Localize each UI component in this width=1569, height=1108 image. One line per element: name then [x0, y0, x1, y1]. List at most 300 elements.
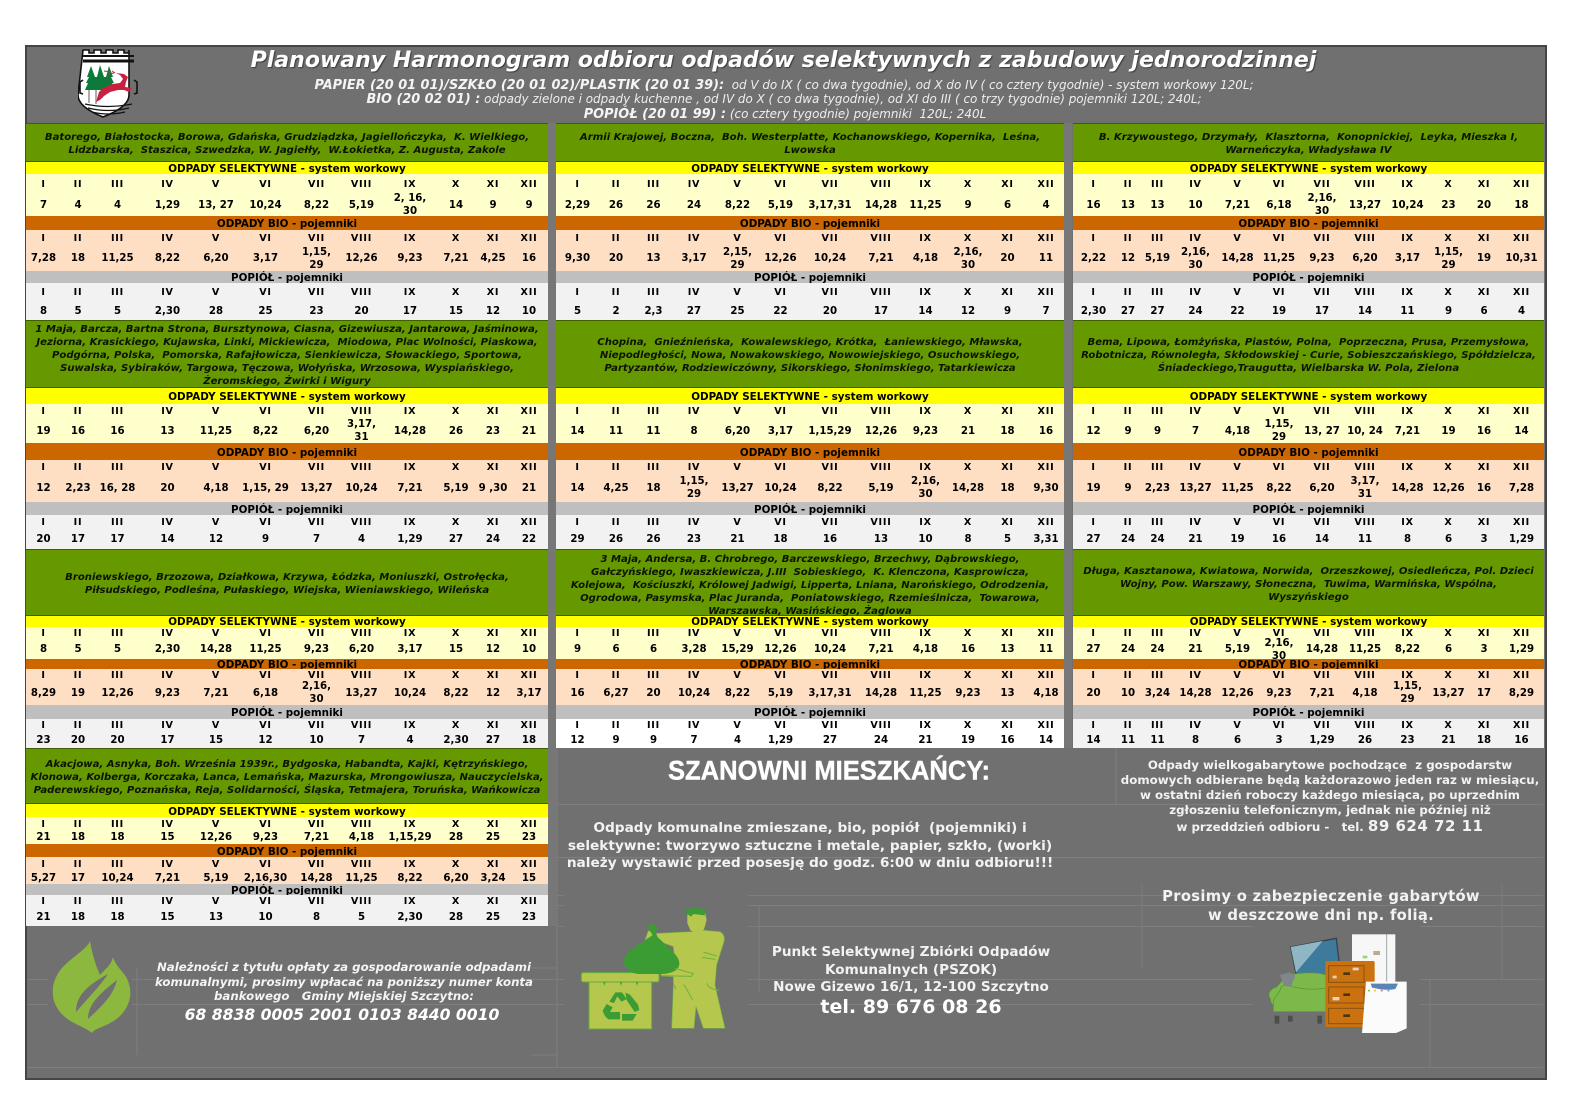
dates: ash: 27 — [1086, 534, 1101, 544]
months: ash: V — [1233, 720, 1242, 731]
dates: bio waste: 16 — [570, 688, 585, 698]
months: selective waste: VIII — [870, 178, 892, 190]
street list — [556, 123, 1064, 162]
dates: selective waste: 14,28 — [200, 644, 232, 655]
heading: selective waste — [26, 616, 548, 627]
dates: selective waste: 8,22 — [304, 200, 329, 210]
heading: bio waste: ODPADY BIO - pojemniki — [217, 218, 357, 230]
dates: selective waste: 11,25 — [200, 426, 232, 436]
panel: schedule group 3 — [1073, 123, 1544, 320]
icon: man putting bag in recycling bin — [564, 895, 748, 1040]
months: selective waste: III — [647, 406, 660, 417]
months: bio waste: VIII — [351, 859, 372, 870]
months: bio waste: IV — [161, 232, 174, 244]
months: bio waste: IX — [919, 670, 932, 680]
months: bio waste: XI — [487, 462, 499, 472]
dates: ash: 8 — [1192, 734, 1199, 746]
dates: ash: 6 — [1445, 534, 1452, 544]
dates: ash: 19 — [961, 734, 975, 746]
months: bio waste: V — [733, 462, 742, 472]
months: ash: X — [452, 516, 460, 528]
months: ash: III — [1151, 720, 1164, 731]
months: selective waste: X — [1444, 406, 1453, 417]
dates: selective waste: 6 — [1004, 200, 1011, 210]
dates: bio waste: 3,17, — [1350, 476, 1380, 487]
months: selective waste: XII — [1038, 178, 1054, 190]
months: selective waste: VIII — [351, 178, 372, 190]
months: selective waste: IV — [688, 628, 700, 639]
months: ash: II — [1124, 720, 1132, 731]
street list — [26, 549, 548, 616]
months: selective waste: IV — [161, 628, 174, 639]
heading: ash: POPIÓŁ - pojemniki — [754, 707, 866, 719]
dates: ash: 9 — [262, 534, 269, 544]
months: selective waste: III — [111, 178, 124, 190]
dates: selective waste: 9 — [525, 200, 533, 210]
months: ash: IV — [1189, 287, 1202, 298]
months: selective waste — [556, 404, 1064, 417]
dates: selective waste: 2,30 — [155, 644, 180, 655]
months: bio waste: VIII — [870, 462, 892, 472]
dates: selective waste: 11 — [1039, 644, 1053, 655]
dates: selective waste: 3,17, — [347, 419, 376, 430]
months: bio waste: II — [612, 232, 620, 244]
months: ash: XI — [1478, 516, 1490, 528]
notice: PSZOK address: Komunalnych (PSZOK) — [825, 962, 997, 978]
months: ash: I — [1091, 720, 1096, 731]
months: bio waste: X — [964, 462, 972, 472]
months: selective waste: IV — [688, 406, 700, 417]
dates: selective waste: 6,20 — [725, 426, 750, 436]
notice: payment details: komunalnymi, prosimy wpłacać na poniższy numer konta — [155, 975, 533, 989]
heading: ash — [26, 271, 548, 283]
months: bio waste: VI — [259, 232, 272, 244]
months: ash: I — [575, 287, 580, 298]
dates: bio waste: 19 — [1477, 253, 1491, 264]
months: bio waste: X — [964, 232, 972, 244]
dates: ash: 26 — [646, 534, 661, 544]
months: selective waste: VI — [774, 406, 787, 417]
months: selective waste: X — [964, 178, 972, 190]
months: ash: XII — [1513, 287, 1530, 298]
dates: bio waste: 12,26 — [345, 253, 378, 264]
months: bio waste — [556, 230, 1064, 244]
months: ash: I — [41, 516, 46, 528]
street list — [26, 320, 548, 388]
dates: bio waste: 13 — [1000, 688, 1015, 698]
dates: bio waste: 29 — [1400, 694, 1415, 705]
dates: bio waste: 11,25 — [1263, 253, 1295, 264]
months: bio waste: III — [111, 232, 124, 244]
months: bio waste: XII — [1513, 232, 1530, 244]
dates: selective waste: 8,22 — [253, 426, 278, 436]
months: ash: VI — [774, 516, 787, 528]
street list: Wyszyńskiego — [1268, 592, 1349, 603]
months: ash: IX — [1401, 287, 1414, 298]
months: ash: VI — [1273, 287, 1285, 298]
months: ash: XII — [1038, 287, 1054, 298]
dates: bio waste: 8,22 — [725, 688, 750, 698]
dates: ash: 11 — [1358, 534, 1372, 544]
dates: selective waste: 11,25 — [249, 644, 282, 655]
months: bio waste: IX — [1401, 670, 1414, 680]
dates: ash: 4 — [358, 534, 365, 544]
heading: ash: POPIÓŁ - pojemniki — [1253, 707, 1364, 719]
months: selective waste: XI — [1001, 628, 1014, 639]
dates: ash: 11 — [1400, 306, 1415, 316]
dates: ash: 11 — [1121, 734, 1135, 746]
months: selective waste: VI — [259, 818, 272, 830]
dates: selective waste: 12,26 — [200, 832, 232, 843]
months: ash: V — [1233, 287, 1242, 298]
dates: ash: 9 — [612, 734, 620, 746]
heading: bio waste: ODPADY BIO - pojemniki — [740, 218, 880, 230]
dates: bio waste: 14,28 — [1221, 253, 1254, 264]
dates: ash: 7 — [313, 534, 320, 544]
dates: bio waste: 10,24 — [101, 872, 134, 884]
months: selective waste: XI — [1478, 178, 1490, 190]
months: selective waste: II — [74, 406, 82, 417]
dates: selective waste: 6 — [1445, 644, 1452, 655]
street list: Partyzantów, Rodziewiczówny, Sikorskiego, Słonimskiego, Tatarkiewicza — [604, 362, 1016, 374]
months: bio waste: XII — [1513, 462, 1530, 472]
dates: selective waste: 18 — [1514, 200, 1529, 210]
dates: selective waste: 4 — [114, 200, 121, 210]
heading: selective waste: ODPADY SELEKTYWNE - system workowy — [691, 391, 929, 403]
months: ash: V — [733, 516, 742, 528]
dates: selective waste: 21 — [36, 832, 51, 843]
months: bio waste: VIII — [351, 670, 372, 680]
dates: bio waste: 12 — [486, 688, 500, 698]
dates: selective waste: 12,26 — [865, 426, 897, 436]
months: selective waste: IV — [1189, 628, 1202, 639]
dates: ash: 24 — [486, 534, 500, 544]
heading: bio waste — [26, 844, 548, 857]
dates: selective waste: 13,27 — [1349, 200, 1381, 210]
months: ash: XI — [487, 720, 499, 731]
street list — [26, 748, 548, 804]
months: selective waste: II — [74, 628, 82, 639]
dates: selective waste: 10,24 — [814, 644, 846, 655]
months: bio waste: XI — [1001, 232, 1014, 244]
months: bio waste: VI — [259, 670, 272, 680]
dates: bio waste — [26, 472, 548, 502]
notice: bulky waste collection: zgłoszeniu telefonicznym, jednak nie później niż — [1169, 803, 1491, 817]
months: ash: XII — [1038, 516, 1054, 528]
heading: ash — [26, 502, 548, 515]
months: selective waste — [556, 627, 1064, 638]
months: selective waste: II — [612, 628, 620, 639]
heading: bio waste — [26, 443, 548, 460]
dates: bio waste: 29 — [687, 489, 701, 500]
icon: green leaf — [48, 938, 132, 1038]
months: ash: VIII — [351, 287, 372, 298]
dates: bio waste: 12,26 — [1221, 688, 1254, 698]
months: selective waste: XI — [487, 178, 499, 190]
months: ash: II — [1124, 287, 1132, 298]
subtitle: paper, glass, plastic schedule: PAPIER (20 01 01)/SZKŁO (20 01 02)/PLASTIK (20 01 39): od V do IX ( co dwa tygodnie), od X do IV ( co cztery tygodnie) - system workowy 120L; — [314, 78, 1254, 93]
dates: selective waste: 10 — [1188, 200, 1203, 210]
dates: selective waste: 13 — [1121, 200, 1135, 210]
months: ash: VIII — [870, 516, 892, 528]
heading: bio waste — [556, 659, 1064, 669]
months: ash: VI — [774, 720, 787, 731]
street list — [1073, 123, 1544, 162]
dates: selective waste: 2, 16, — [394, 193, 426, 204]
months: bio waste: II — [612, 462, 620, 472]
dates: bio waste: 18 — [646, 482, 661, 494]
months: ash: I — [41, 287, 46, 298]
street list: 3 Maja, Andersa, B. Chrobrego, Barczewskiego, Brzechwy, Dąbrowskiego, — [600, 554, 1020, 565]
months: selective waste: IX — [404, 178, 416, 190]
months: ash: VIII — [1354, 516, 1376, 528]
dates: ash: 9 — [650, 734, 657, 746]
dates: bio waste: 29 — [1441, 260, 1456, 270]
dates: bio waste — [1073, 472, 1544, 502]
months: selective waste: I — [41, 406, 46, 417]
city coat of arms logo — [78, 49, 138, 118]
months: bio waste: I — [41, 859, 46, 870]
dates: selective waste: 30 — [1315, 206, 1329, 217]
heading: dear residents: SZANOWNI MIESZKAŃCY: — [668, 756, 990, 786]
dates: ash: 28 — [449, 912, 463, 922]
months: ash: VI — [774, 287, 787, 298]
months: ash: IX — [404, 516, 416, 528]
dates: bio waste: 3,17,31 — [808, 688, 852, 698]
street list: Klonowa, Kolberga, Korczaka, Lanca, Lemańska, Mazurska, Mrongowiusza, Nauczycielska, — [30, 772, 543, 783]
dates: ash: 22 — [773, 306, 788, 316]
dates: selective waste: 9 — [574, 644, 581, 655]
dates: ash: 24 — [1150, 534, 1165, 544]
months: ash: IV — [688, 720, 700, 731]
dates: selective waste: 8 — [690, 426, 698, 436]
months: selective waste: II — [1124, 628, 1132, 639]
dates: bio waste: 17 — [71, 872, 85, 884]
street list: Żeromskiego, Żwirki i Wigury — [203, 376, 371, 386]
dates: bio waste: 10,24 — [394, 688, 426, 698]
dates: selective waste: 19 — [36, 426, 51, 436]
dates: ash: 27 — [449, 534, 463, 544]
months: ash: X — [964, 516, 972, 528]
notice: payment details: Należności z tytułu opłaty za gospodarowanie odpadami — [157, 960, 531, 974]
dates: selective waste: 14,28 — [865, 200, 897, 210]
months: selective waste: IX — [919, 178, 932, 190]
months: selective waste: V — [212, 628, 220, 639]
months: selective waste: VIII — [1354, 178, 1376, 190]
months: selective waste: V — [212, 818, 220, 830]
months: ash — [556, 515, 1064, 527]
months: selective waste: VIII — [351, 628, 372, 639]
dates: selective waste: 5,19 — [1225, 644, 1250, 655]
dates: ash: 6 — [1234, 734, 1241, 746]
dates: ash: 3,31 — [1033, 534, 1059, 544]
notice: bulky waste collection: w przeddzień odbioru - tel. 89 624 72 11 — [1176, 817, 1484, 835]
dates: selective waste: 13, 27 — [198, 200, 234, 210]
dates: bio waste: 9,23 — [397, 253, 423, 264]
street list: Jeziorna, Krasickiego, Kujawska, Linki, Mickiewicza, Miodowa, Plac Wolności, Piaskowa, — [36, 336, 538, 348]
panel: schedule group 1 — [26, 123, 548, 320]
months: selective waste — [26, 627, 548, 638]
months: ash: III — [111, 720, 124, 731]
dates: bio waste: 8,29 — [1509, 688, 1534, 698]
dates: bio waste: 2,23 — [65, 482, 91, 494]
months: bio waste: VII — [822, 670, 838, 680]
months: ash: V — [212, 287, 220, 298]
dates: ash: 8 — [40, 306, 47, 316]
dates: selective waste: 1,29 — [155, 200, 180, 210]
notice: bulky waste collection — [1121, 758, 1539, 835]
months: bio waste — [556, 460, 1064, 472]
heading: bio waste — [26, 216, 548, 230]
months: bio waste: X — [452, 670, 460, 680]
months: bio waste: V — [212, 462, 220, 472]
dates: ash: 21 — [1441, 734, 1456, 746]
dates: ash — [1073, 527, 1544, 549]
months: ash: VII — [1314, 287, 1330, 298]
months: ash: IX — [404, 720, 416, 731]
dates: selective waste: 21 — [961, 426, 975, 436]
dates: selective waste: 6,20 — [349, 644, 374, 655]
dates: ash — [26, 730, 548, 748]
dates: ash: 26 — [1358, 734, 1372, 746]
dates: selective waste: 14 — [449, 200, 463, 210]
street list — [26, 123, 548, 162]
months: selective waste: VIII — [870, 628, 892, 639]
months: ash: IX — [919, 516, 932, 528]
dates: ash: 25 — [730, 306, 745, 316]
dates: selective waste: 4,18 — [1225, 426, 1250, 436]
dates: selective waste: 15 — [449, 644, 463, 655]
dates: bio waste: 7,21 — [443, 253, 469, 264]
months: bio waste: I — [41, 670, 46, 680]
dates: bio waste: 5,19 — [1145, 253, 1170, 264]
months: bio waste: IX — [404, 232, 416, 244]
dates: bio waste — [556, 244, 1064, 271]
notice: PSZOK address: Nowe Gizewo 16/1, 12-100 Szczytno — [773, 979, 1049, 995]
dates: bio waste: 30 — [918, 489, 933, 500]
dates: bio waste — [556, 679, 1064, 705]
dates: selective waste: 18 — [1000, 426, 1015, 436]
street list: Wojny, Pow. Warszawy, Słoneczna, Tuwima, Warmińska, Wspólna, — [1120, 579, 1497, 590]
months: selective waste: VIII — [351, 406, 372, 417]
dates: bio waste: 5,19 — [443, 482, 469, 494]
months: selective waste: V — [212, 178, 220, 190]
dates: ash: 23 — [1400, 734, 1415, 746]
heading: bio waste: ODPADY BIO - pojemniki — [1238, 218, 1379, 230]
months: selective waste: V — [1233, 406, 1242, 417]
dates: selective waste: 7,21 — [304, 832, 329, 843]
dates: ash: 8 — [313, 912, 320, 922]
months: ash: XI — [487, 516, 499, 528]
dates: ash: 28 — [209, 306, 223, 316]
months: selective waste — [556, 174, 1064, 192]
months: selective waste: VII — [1314, 406, 1330, 417]
months: ash: IV — [1189, 516, 1202, 528]
months: bio waste: XI — [1478, 462, 1490, 472]
dates: bio waste: 4,18 — [203, 482, 229, 494]
dates: ash: 5 — [1004, 534, 1011, 544]
months: ash: XII — [521, 896, 537, 907]
dates: selective waste: 6 — [650, 644, 657, 655]
dates: ash: 10 — [522, 306, 536, 316]
dates: bio waste: 19 — [71, 688, 85, 698]
months: bio waste: IV — [161, 462, 174, 472]
dates: bio waste: 11,25 — [909, 688, 942, 698]
dates: bio waste — [1073, 244, 1544, 271]
street list: Warneńczyka, Władysława IV — [1225, 144, 1392, 156]
months: bio waste: V — [212, 232, 220, 244]
dates: ash: 12 — [961, 306, 975, 316]
panel: schedule group 8 — [556, 549, 1064, 748]
dates: selective waste: 3,28 — [681, 644, 707, 655]
dates: bio waste: 20 — [160, 482, 175, 494]
dates: selective waste — [1073, 417, 1544, 443]
dates: selective waste: 7,21 — [1225, 200, 1250, 210]
dates: ash: 10 — [258, 912, 273, 922]
months: ash: IV — [1189, 720, 1202, 731]
months: ash: VI — [1273, 720, 1285, 731]
months: ash: VI — [1273, 516, 1285, 528]
months: bio waste: IX — [1401, 462, 1414, 472]
dates: selective waste: 1,15,29 — [388, 832, 432, 843]
months: ash: I — [41, 720, 46, 731]
dates: ash: 19 — [1230, 534, 1245, 544]
notice: PSZOK address — [772, 944, 1050, 995]
months: bio waste: XII — [1038, 232, 1054, 244]
dates: bio waste: 2,16, — [953, 246, 982, 258]
months: bio waste — [1073, 460, 1544, 472]
dates: ash: 21 — [36, 912, 51, 922]
dates: ash: 24 — [1121, 534, 1135, 544]
months: ash: XI — [1478, 720, 1490, 731]
months: ash — [1073, 515, 1544, 527]
street list: Ogrodowa, Pasymska, Plac Juranda, Poniatowskiego, Rzemieślnicza, Towarowa, — [580, 593, 1040, 604]
months: selective waste: II — [612, 406, 620, 417]
months: bio waste: XII — [521, 670, 537, 680]
dates: ash — [556, 527, 1064, 549]
months: bio waste: VI — [259, 462, 272, 472]
months: bio waste: V — [1233, 232, 1242, 244]
months: selective waste: XII — [521, 818, 537, 830]
months: bio waste: II — [1124, 670, 1132, 680]
months: bio waste: X — [452, 462, 460, 472]
months: bio waste: II — [612, 670, 620, 680]
months: bio waste: XI — [1001, 670, 1014, 680]
dates: selective waste: 16 — [1086, 200, 1101, 210]
months: bio waste: VII — [1314, 462, 1330, 472]
heading: bio waste: ODPADY BIO - pojemniki — [217, 446, 357, 458]
months: ash: II — [612, 720, 620, 731]
dates: bio waste: 1,15, 29 — [242, 482, 289, 494]
dates: ash: 25 — [486, 912, 500, 922]
dates: ash: 10 — [309, 734, 324, 746]
dates: selective waste: 9 — [1124, 426, 1132, 436]
dates: selective waste: 23 — [522, 832, 536, 843]
months: selective waste: VII — [822, 406, 838, 417]
months: bio waste: VIII — [870, 232, 892, 244]
dates: bio waste: 8,22 — [155, 253, 180, 264]
dates: selective waste: 7,21 — [868, 644, 894, 655]
dates: bio waste: 20 — [1086, 688, 1101, 698]
months: ash: VI — [259, 287, 272, 298]
dates: bio waste: 3,17 — [516, 688, 542, 698]
dates: bio waste: 10,24 — [345, 482, 378, 494]
months: ash: V — [212, 896, 220, 907]
dates: ash: 4 — [734, 734, 741, 746]
heading: selective waste — [1073, 616, 1544, 627]
months: ash: XI — [487, 896, 499, 907]
dates: ash: 14 — [1358, 306, 1372, 316]
